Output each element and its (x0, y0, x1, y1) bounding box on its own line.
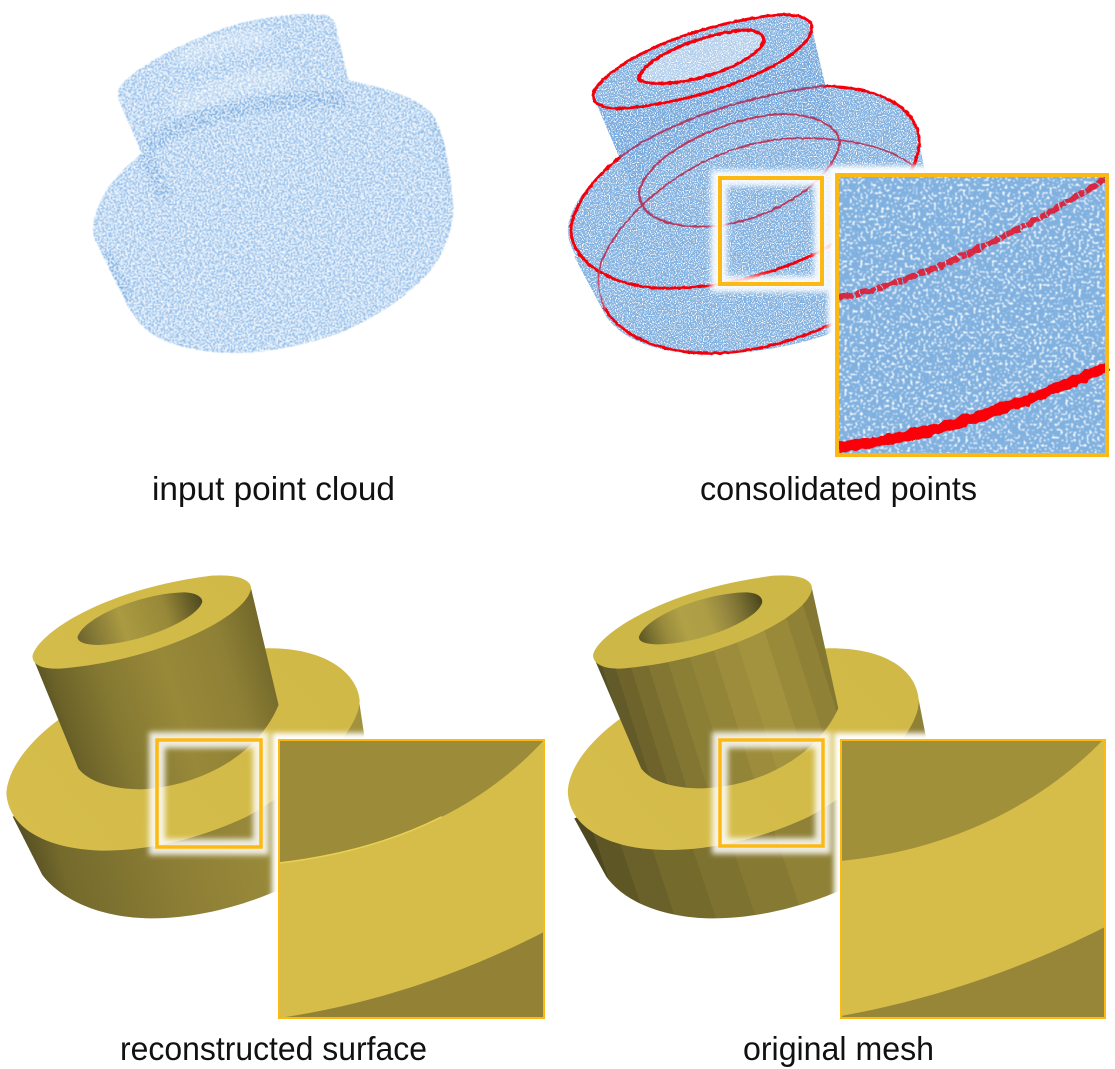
panel: input point cloud (92, 13, 454, 507)
inset: reconstructed close-up (279, 740, 544, 1018)
glow around inset (828, 166, 1115, 464)
inset: original mesh close-up (841, 740, 1105, 1018)
panel: reconstructed surface (6, 575, 552, 1067)
glow around focus box (157, 740, 261, 847)
inset: consolidated close-up (837, 175, 1107, 455)
glow around focus box (720, 740, 823, 846)
focus box (157, 740, 261, 847)
3D model: reconstructed (6, 575, 365, 918)
point cloud: input scan (92, 13, 454, 354)
label: consolidated points: consolidated points (700, 470, 977, 507)
panel: consolidated points (568, 15, 1115, 507)
glow around inset (834, 733, 1112, 1025)
glow around focus box (719, 178, 822, 284)
label: input point cloud: input point cloud (152, 470, 395, 507)
point cloud: consolidated (568, 15, 927, 354)
focus box (720, 178, 822, 284)
feature lines: red edge curves (571, 15, 920, 353)
label: reconstructed surface: reconstructed surface (120, 1030, 427, 1067)
focus box (720, 740, 823, 846)
label: original mesh: original mesh (743, 1030, 934, 1067)
panel: original mesh (568, 575, 1112, 1067)
3D model: original mesh (568, 575, 927, 918)
glow around inset (272, 733, 552, 1025)
